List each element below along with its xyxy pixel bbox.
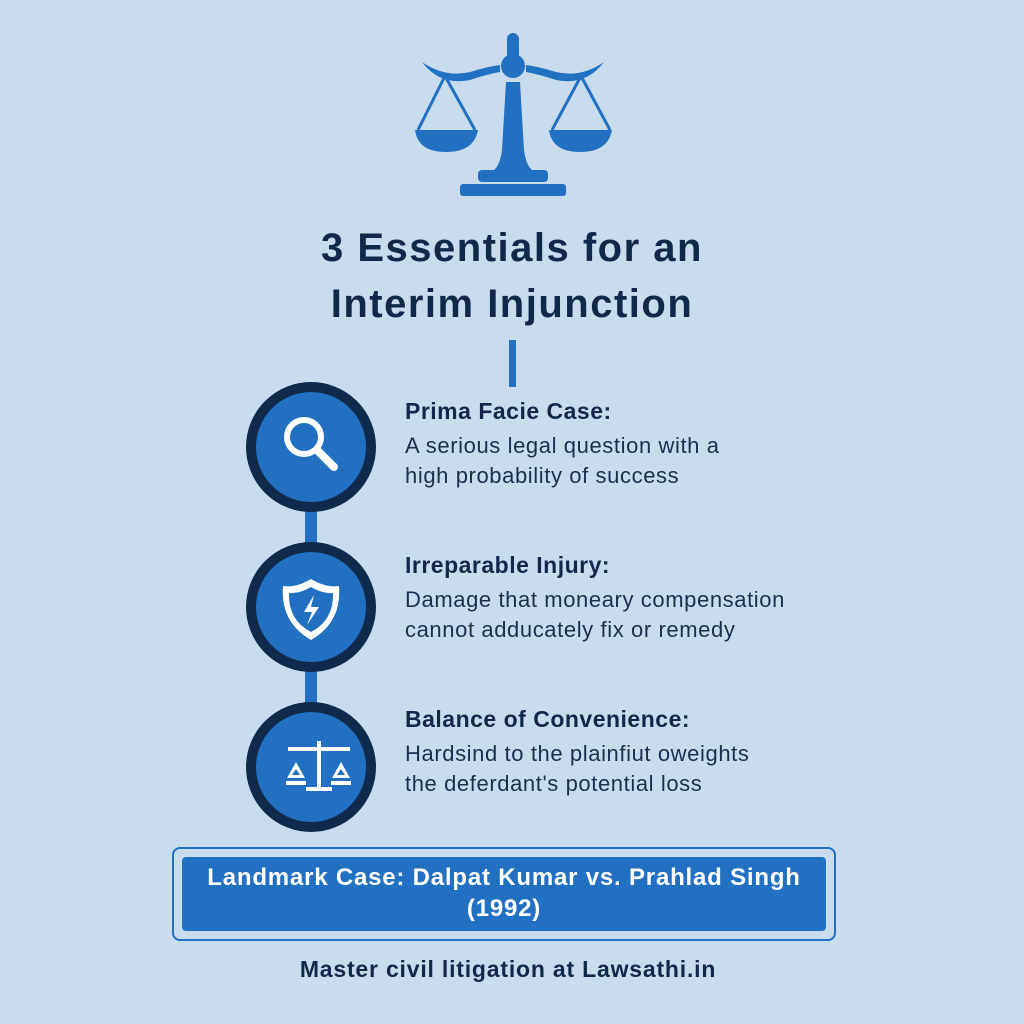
icon: magnifier circle [246, 382, 376, 512]
item 2 text: cannot adducately fix or remedy [405, 617, 735, 642]
landmark case box: (1992) [467, 895, 541, 922]
timeline connectors [305, 500, 317, 740]
title: Interim Injunction [331, 282, 693, 326]
item 3 text [405, 706, 749, 796]
title: 3 Essentials for an [321, 226, 703, 270]
footer: Master civil litigation at Lawsathi.in [300, 956, 716, 982]
title [321, 226, 703, 326]
item 2 text: Damage that moneary compensation [405, 587, 785, 612]
item 2 text: Irreparable Injury: [405, 552, 610, 578]
item 2 text [405, 552, 785, 642]
landmark case box [172, 847, 836, 941]
connector line [509, 340, 516, 387]
item 1 text: A serious legal question with a [405, 433, 720, 458]
item 3 text: Balance of Convenience: [405, 706, 690, 732]
landmark case box: Landmark Case: Dalpat Kumar vs. Prahlad Singh [207, 864, 801, 891]
icon: shield circle [246, 542, 376, 672]
item 3 text: Hardsind to the plainfiut oweights [405, 741, 749, 766]
item 1 text [405, 398, 720, 488]
item 3 text: the deferdant's potential loss [405, 771, 702, 796]
item 1 text: high probability of success [405, 463, 679, 488]
icon: scales of justice [415, 33, 612, 196]
icon: balance circle [246, 702, 376, 832]
item 1 text: Prima Facie Case: [405, 398, 612, 424]
